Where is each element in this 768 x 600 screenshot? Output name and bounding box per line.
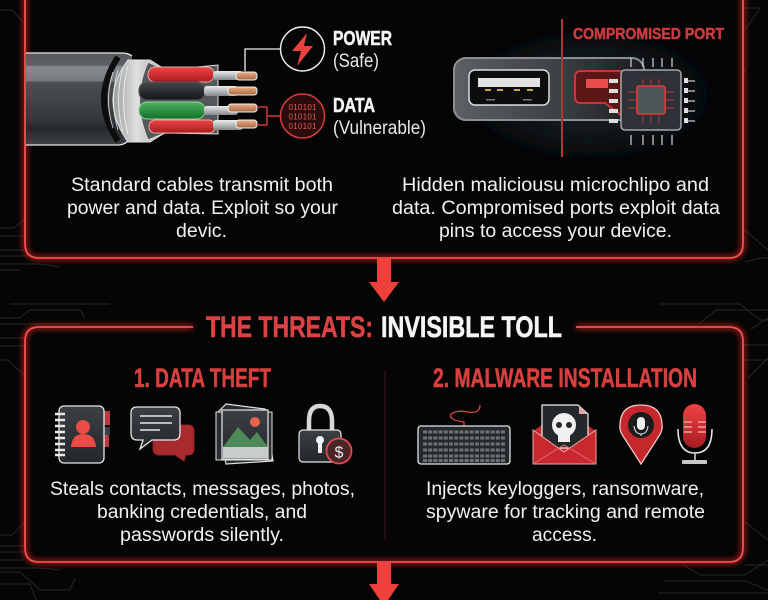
icon: microphone — [678, 404, 712, 464]
power label: (Safe) — [333, 51, 379, 72]
threats heading — [206, 311, 562, 344]
data label — [333, 95, 426, 139]
leader bracket: data — [257, 107, 281, 125]
threats heading: THE THREATS: — [206, 311, 373, 344]
illustration: compromised USB port — [440, 15, 740, 175]
icon: message bubbles — [131, 407, 194, 461]
malware description: spyware for tracking and remote — [426, 502, 705, 523]
icon: location microphone pin — [620, 405, 662, 464]
icon: power bolt — [280, 27, 324, 71]
icon: binary data: 010101 — [288, 122, 317, 131]
leader line: power — [245, 49, 281, 71]
icon: photos — [216, 404, 273, 464]
power label: POWER — [333, 28, 392, 50]
data theft description: banking credentials, and — [97, 502, 307, 523]
malware description — [426, 479, 705, 546]
data theft description: Steals contacts, messages, photos, — [50, 479, 355, 500]
arrow: down from threats — [369, 563, 399, 600]
icon: contacts book — [55, 406, 110, 463]
icon: keyboard — [418, 405, 510, 464]
port description: Hidden maliciousu microchlipo and — [402, 175, 709, 196]
port description: data. Compromised ports exploit data — [392, 198, 720, 219]
compromised port label: COMPROMISED PORT — [573, 26, 724, 43]
cable description: power and data. Exploit so your — [67, 198, 339, 219]
data label: (Vulnerable) — [333, 118, 426, 139]
arrow: down to threats — [369, 258, 399, 302]
data label: DATA — [333, 95, 375, 117]
data theft description — [50, 479, 355, 546]
cable description: Standard cables transmit both — [71, 175, 333, 196]
panel: how it works — [25, 0, 743, 258]
cable wires — [139, 67, 257, 133]
panel: threats — [25, 311, 743, 562]
chip — [609, 58, 695, 145]
icon: padlock with dollar: $ — [335, 444, 344, 462]
icon: padlock with dollar — [299, 406, 352, 464]
heading: data theft: 1. DATA THEFT — [134, 363, 271, 393]
threats heading: INVISIBLE TOLL — [381, 311, 562, 344]
malware description: access. — [532, 525, 597, 546]
icon: binary data — [280, 94, 324, 138]
malware description: Injects keyloggers, ransomware, — [426, 479, 704, 500]
port description — [392, 175, 720, 242]
icon: binary data: 010101 — [288, 103, 317, 112]
power label — [333, 28, 392, 72]
port description: pins to access your device. — [439, 221, 672, 242]
icon: binary data: 010101 — [288, 112, 317, 122]
cable description — [67, 175, 339, 242]
icon: skull envelope — [533, 405, 596, 464]
cable description: devic. — [176, 221, 227, 242]
compromised divider — [561, 19, 563, 157]
data theft description: passwords silently. — [120, 525, 284, 546]
illustration: cable cross-section — [26, 53, 257, 145]
